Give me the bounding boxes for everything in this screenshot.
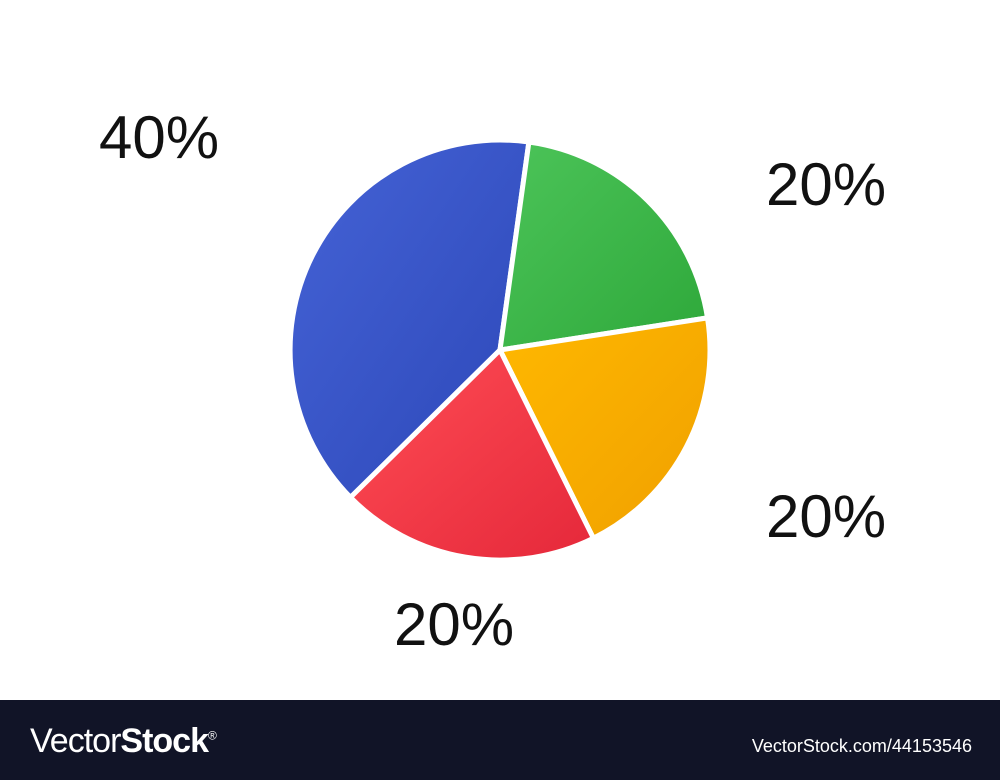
label: 20% yellow: 20% [766, 483, 886, 550]
footer id: VectorStock.com/44153546 [752, 736, 972, 756]
footer bar [0, 700, 1000, 780]
slice: yellow 20% [500, 318, 710, 538]
footer logo: VectorStock® [30, 722, 216, 760]
slice: red 20% [350, 350, 593, 560]
slice: blue 40% [290, 140, 529, 497]
slice: green 20% [500, 142, 708, 350]
label: 40%: 40% [99, 104, 219, 171]
label: 20% green: 20% [766, 151, 886, 218]
label: 20% red: 20% [394, 591, 514, 658]
